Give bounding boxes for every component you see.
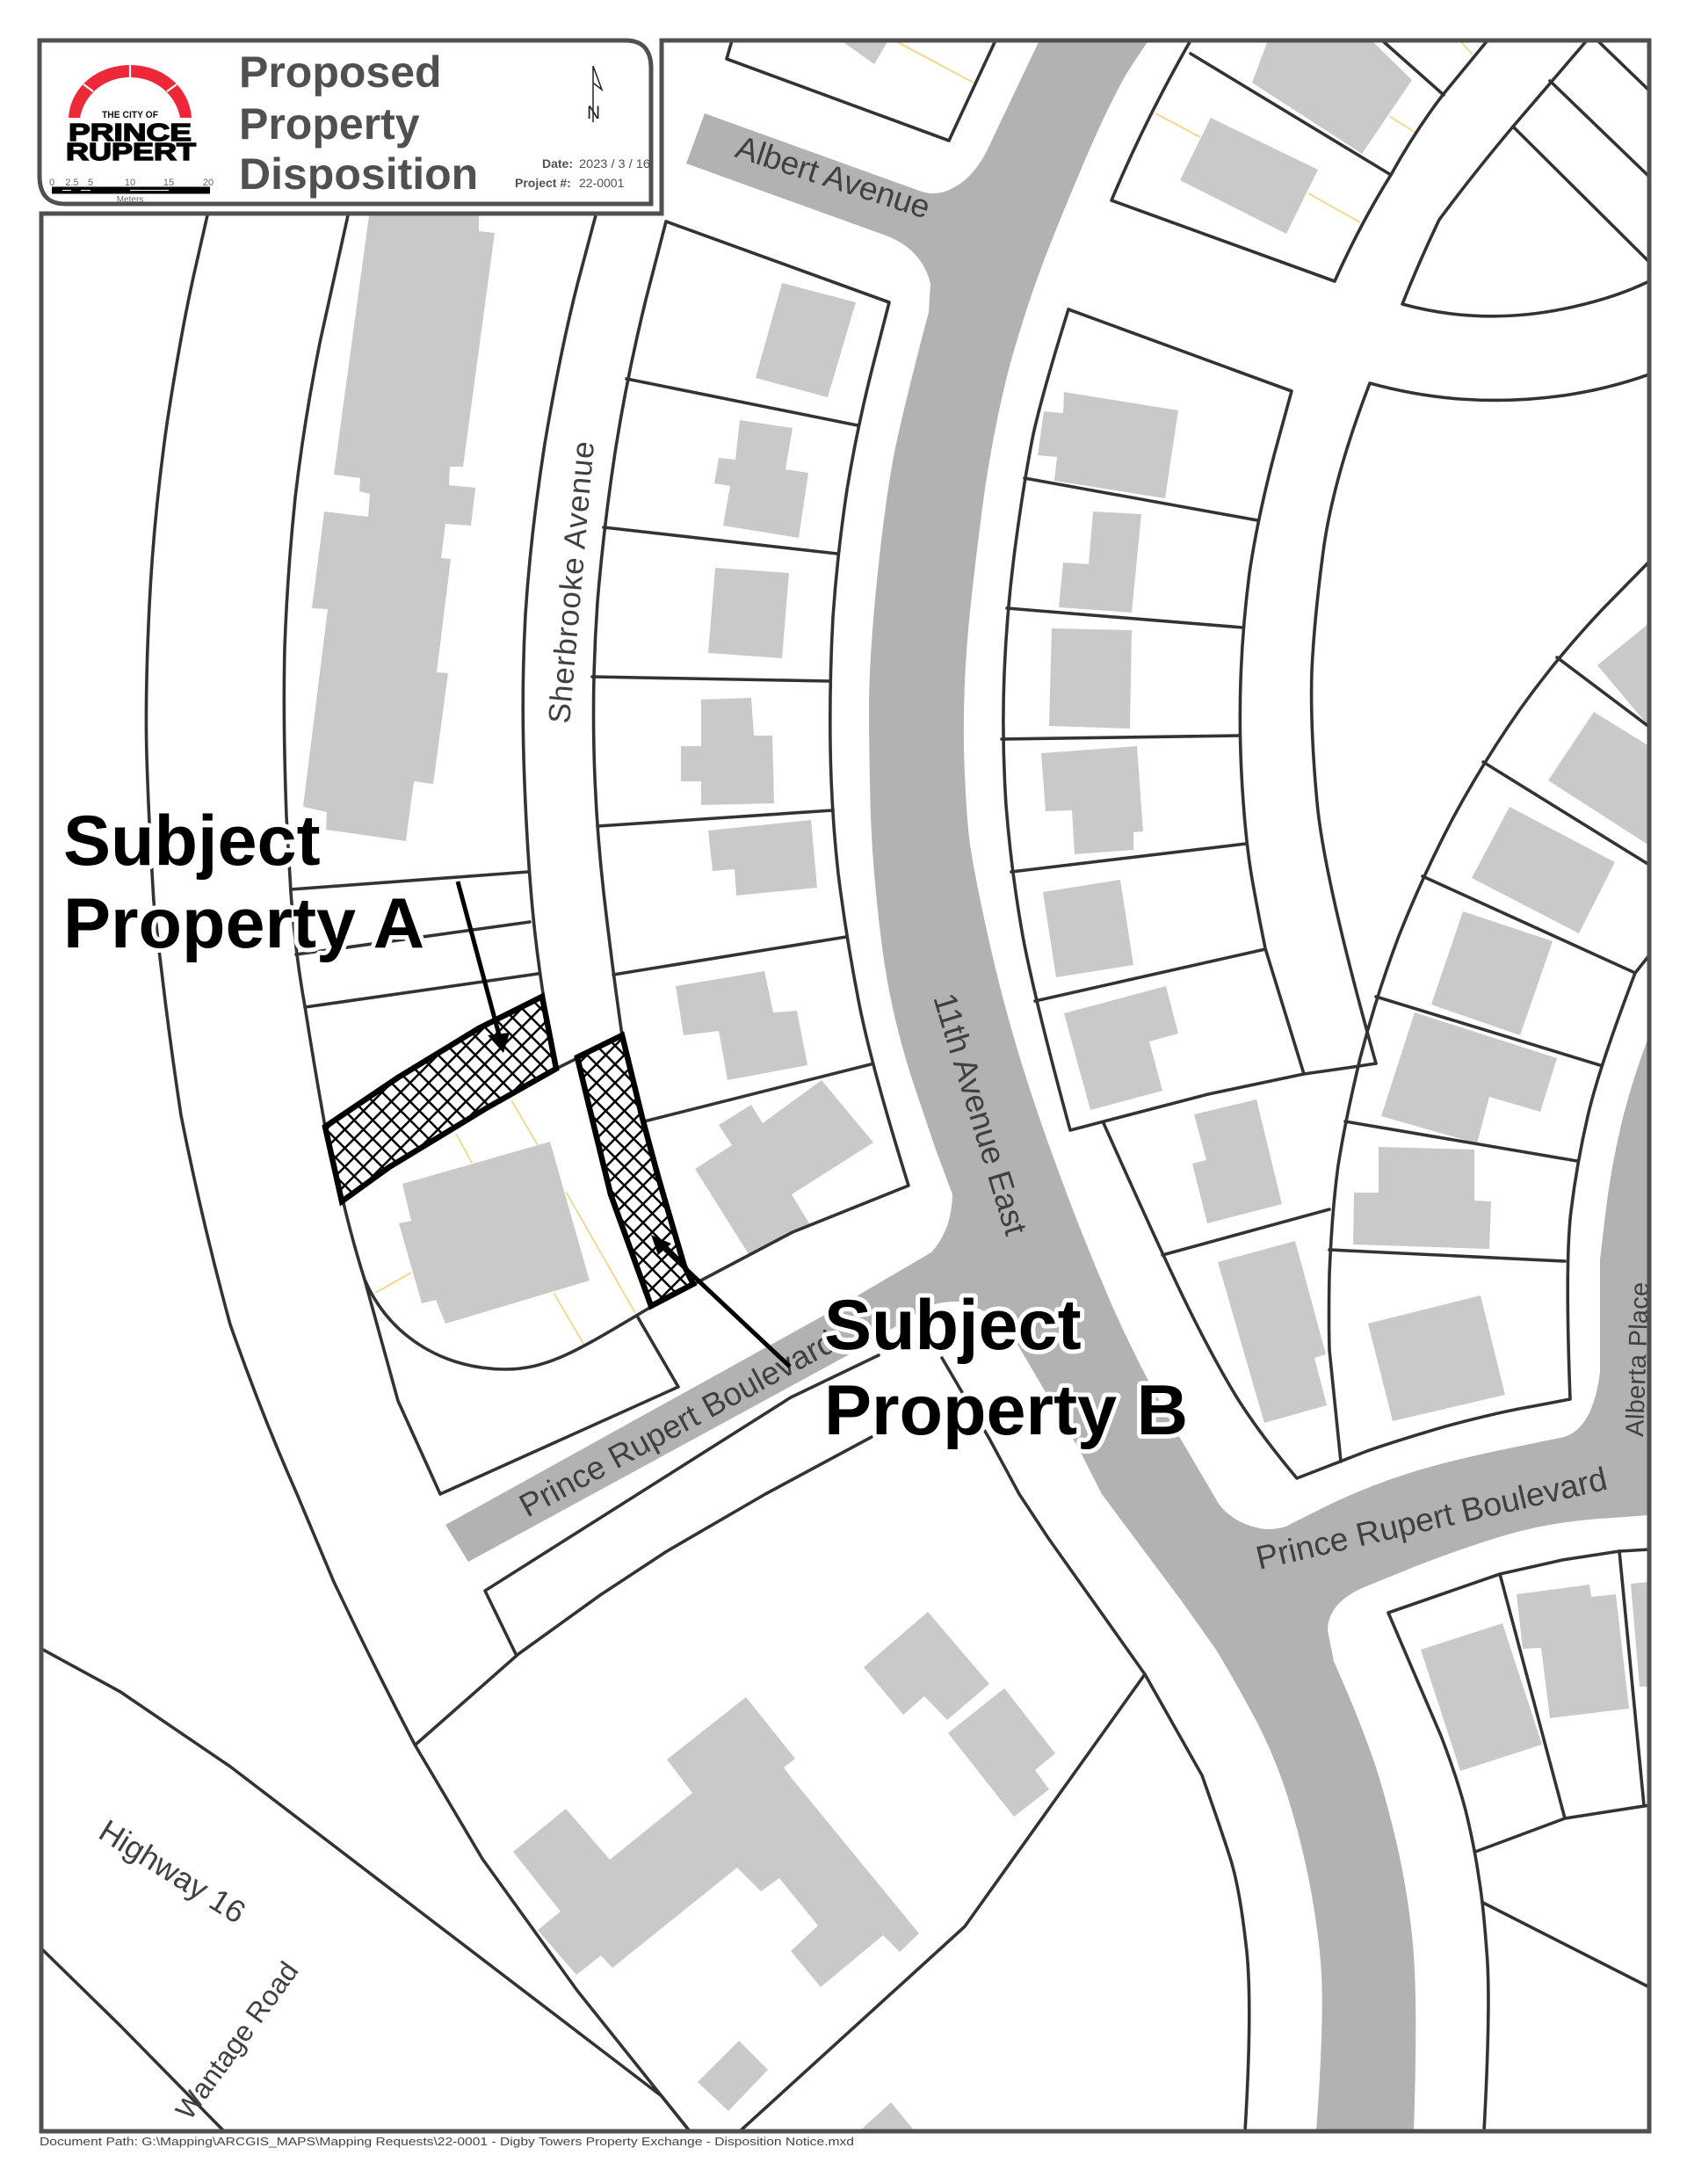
arrow to property B xyxy=(651,1235,790,1367)
subject property A hatched parcel xyxy=(343,1195,344,1196)
scale bar xyxy=(49,178,214,205)
scale labels: 0 xyxy=(49,178,54,188)
title text: Property xyxy=(239,99,420,149)
label: Alberta Place: Alberta Place xyxy=(1621,1281,1654,1437)
scale labels: 2.5 xyxy=(65,178,79,188)
logo text: THE CITY OF: THE CITY OF xyxy=(102,110,158,120)
title text: Proposed xyxy=(239,47,442,97)
subject property A hatching xyxy=(325,997,556,1201)
callout text B: Subject xyxy=(824,1286,1082,1365)
label: Albert Avenue: Albert Avenue xyxy=(732,129,935,226)
title block xyxy=(40,40,651,205)
date and project number xyxy=(515,156,650,190)
building footprints xyxy=(303,40,1649,2131)
easement lines xyxy=(375,40,1473,1346)
callout: Subject Property A xyxy=(63,802,510,1053)
subject property B hatched parcel xyxy=(577,1035,693,1306)
date and project number: Date: xyxy=(542,156,573,171)
scale labels: 5 xyxy=(88,178,93,188)
road network: 11th Avenue, Albert Avenue, Prince Rupert Boulevard, Alberta Place xyxy=(445,40,1649,2131)
label: Prince Rupert Boulevard west: Prince Rupert Boulevard xyxy=(513,1324,842,1524)
logo arch xyxy=(69,62,192,118)
date and project number: 2023 / 3 / 16 xyxy=(579,156,650,171)
north arrow: N xyxy=(587,103,600,123)
title text xyxy=(239,47,478,199)
date and project number: Project #: xyxy=(515,176,571,190)
scale labels xyxy=(49,178,214,205)
subject property B hatching xyxy=(577,1035,693,1306)
date and project number: 22-0001 xyxy=(579,176,625,190)
logo text: PRINCE: PRINCE xyxy=(69,119,192,146)
callout: Subject Property B xyxy=(651,1235,1188,1450)
label: Highway 16: Highway 16 xyxy=(93,1812,252,1930)
title block frame xyxy=(40,40,651,204)
label: Sherbrooke Avenue: Sherbrooke Avenue xyxy=(542,440,601,725)
callout text B: Property B xyxy=(824,1371,1188,1450)
scale labels: Meters xyxy=(117,195,143,205)
logo text: RUPERT: RUPERT xyxy=(66,138,196,165)
logo: City of Prince Rupert xyxy=(66,62,196,165)
callout text A xyxy=(63,802,424,963)
arrow to property A xyxy=(458,882,510,1053)
north arrow xyxy=(587,66,602,123)
scale labels: 20 xyxy=(203,178,214,188)
callout text B xyxy=(824,1286,1188,1450)
callout text A: Subject xyxy=(63,802,321,881)
title text: Disposition xyxy=(239,149,478,199)
label: Wantage Road: Wantage Road xyxy=(170,1955,304,2125)
scale labels: 15 xyxy=(163,178,174,188)
scale labels: 10 xyxy=(125,178,135,188)
callout text A: Property A xyxy=(63,884,424,963)
label: Prince Rupert Boulevard east: Prince Rupert Boulevard xyxy=(1252,1460,1611,1577)
scale bar graphic xyxy=(52,186,210,193)
mask behind title block xyxy=(0,0,660,212)
label: 11th Avenue East: 11th Avenue East xyxy=(926,989,1034,1240)
document path footer: Document Path: G:\Mapping\ARCGIS_MAPS\Mapping Requests\22-0001 - Digby Towers Property Exchange - Disposition Notice.mxd xyxy=(40,2135,854,2148)
